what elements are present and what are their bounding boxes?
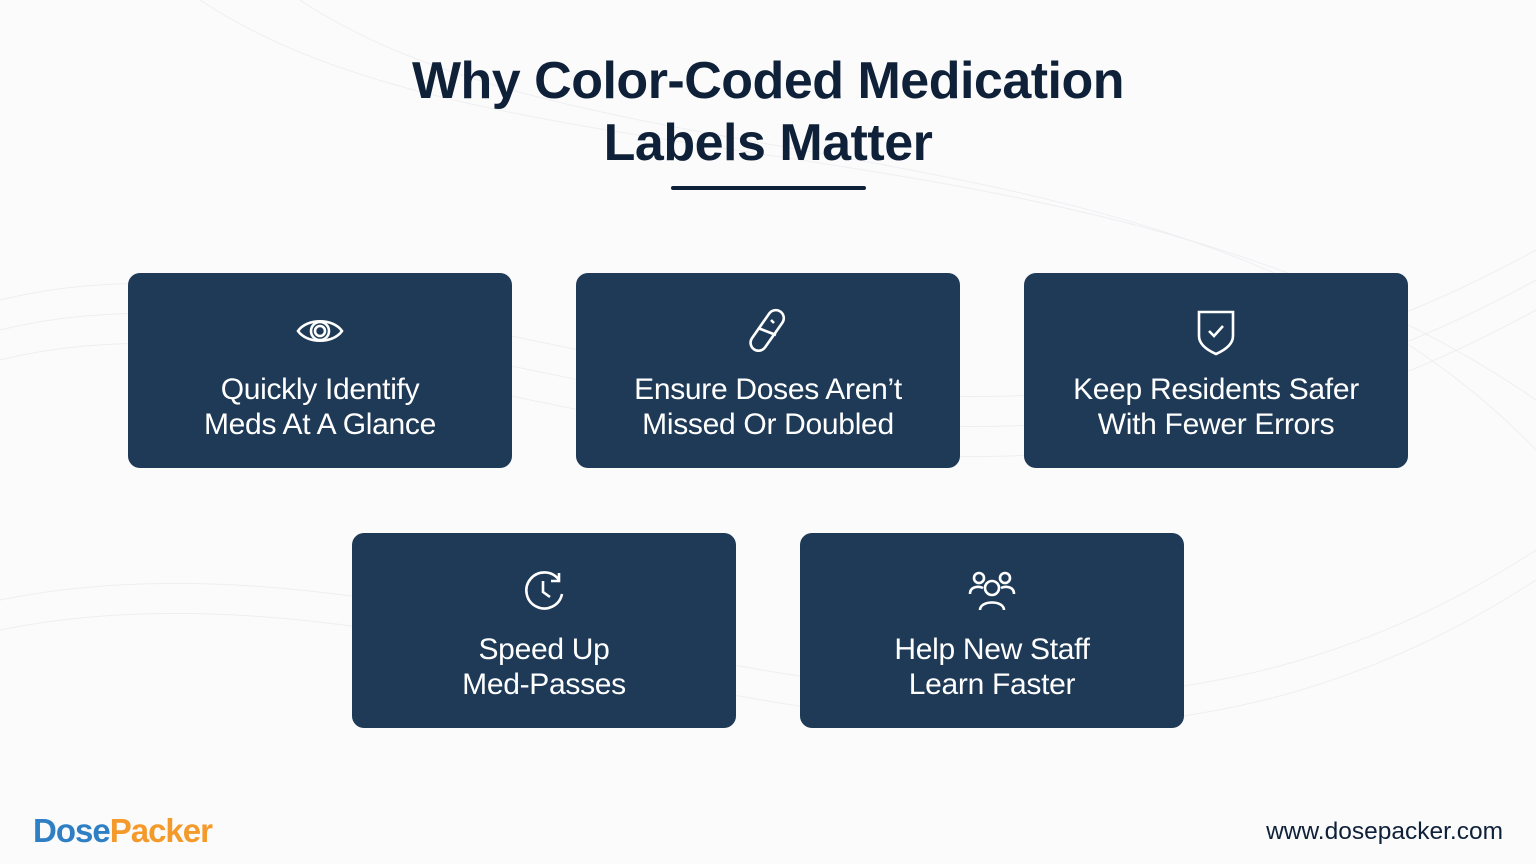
card: identify: Quickly Identify [221, 373, 419, 406]
card: safer: Keep Residents Safer [1073, 373, 1359, 406]
card: safer [1024, 273, 1408, 468]
card: identify [128, 273, 512, 468]
card: doses: Missed Or Doubled [642, 408, 894, 441]
title: Why Color-Coded Medication [412, 52, 1124, 110]
card: staff [800, 533, 1184, 728]
card: speed [352, 533, 736, 728]
title [412, 52, 1124, 172]
card: safer: With Fewer Errors [1098, 408, 1334, 441]
card: identify: Meds At A Glance [204, 408, 436, 441]
logo: DosePacker [33, 812, 212, 849]
card: staff: Help New Staff [894, 633, 1090, 666]
url: www.dosepacker.com [1266, 818, 1503, 845]
icon: shield [1198, 310, 1234, 356]
icon: people [968, 572, 1016, 610]
icon: pill [749, 308, 786, 352]
title: Labels Matter [604, 114, 932, 172]
icon: eye [296, 320, 344, 342]
card: staff: Learn Faster [909, 668, 1075, 701]
card: speed: Med-Passes [462, 668, 626, 701]
icon: clock [525, 571, 564, 610]
card: speed: Speed Up [478, 633, 610, 666]
card: doses: Ensure Doses Aren’t [634, 373, 902, 406]
card: doses [576, 273, 960, 468]
